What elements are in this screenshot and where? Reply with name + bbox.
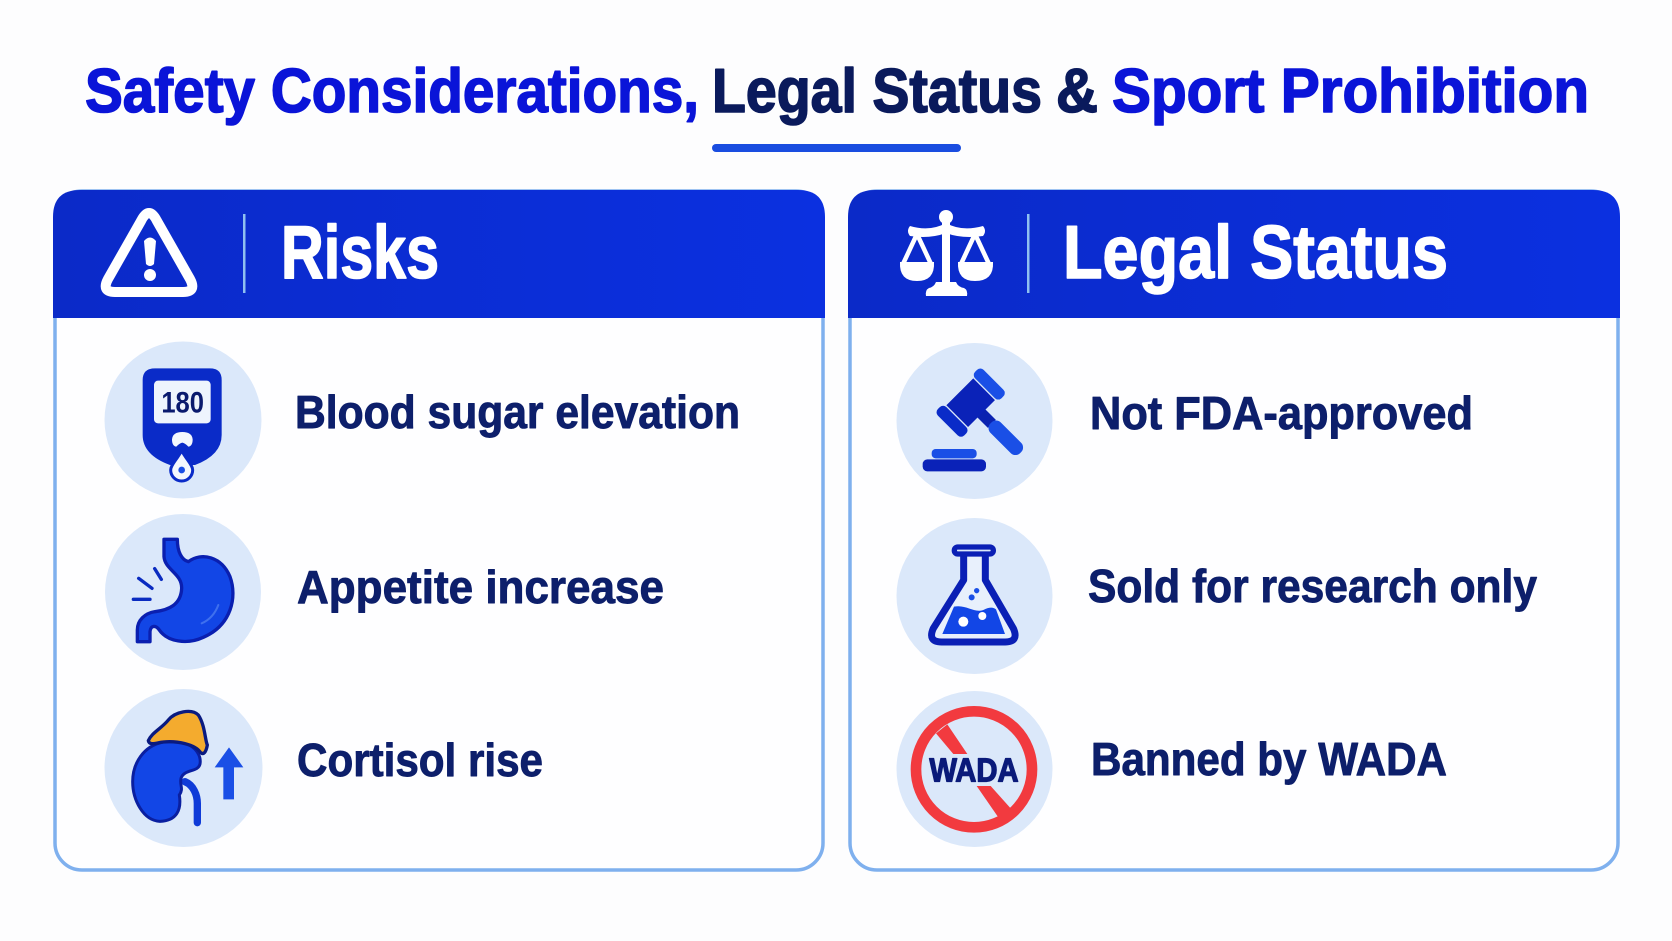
- icon: stomach: [133, 539, 233, 642]
- title: &: [1056, 57, 1098, 126]
- icon: WADA prohibition sign: WADA: [929, 753, 1019, 790]
- risks heading: Risks: [281, 210, 439, 294]
- legal status heading: Legal Status: [1063, 210, 1448, 294]
- item: blood sugar elevation: [104, 342, 740, 498]
- label: Banned by WADA: [1091, 733, 1447, 785]
- item: sold for research only: [896, 518, 1537, 674]
- risks header bar: [53, 190, 825, 318]
- title underline: [712, 144, 961, 152]
- icon: kidney and adrenal gland: [133, 711, 243, 823]
- item: cortisol rise: [104, 689, 543, 847]
- label: Sold for research only: [1088, 560, 1537, 612]
- title: [85, 57, 1589, 126]
- title: Legal Status: [712, 57, 1042, 126]
- item: appetite increase: [105, 514, 664, 670]
- legal header bar: [848, 190, 1620, 318]
- icon: warning triangle: [106, 213, 192, 292]
- panel: risks: [53, 190, 825, 870]
- item: banned by WADA: [896, 691, 1447, 847]
- title: Safety Considerations,: [85, 57, 699, 126]
- panel: legal status: [848, 190, 1620, 870]
- icon: gavel: [923, 367, 1043, 475]
- label: Cortisol rise: [297, 734, 543, 786]
- icon: WADA prohibition sign: [916, 711, 1032, 827]
- label: Appetite increase: [297, 561, 664, 613]
- icon: flask: [932, 547, 1015, 642]
- icon: glucose meter: [143, 368, 222, 481]
- label: Not FDA-approved: [1090, 387, 1473, 439]
- label: Blood sugar elevation: [295, 386, 740, 438]
- icon: scales of justice: [900, 210, 993, 296]
- icon: glucose meter: 180: [161, 387, 204, 420]
- title: Sport Prohibition: [1112, 57, 1589, 126]
- item: not FDA-approved: [896, 343, 1473, 499]
